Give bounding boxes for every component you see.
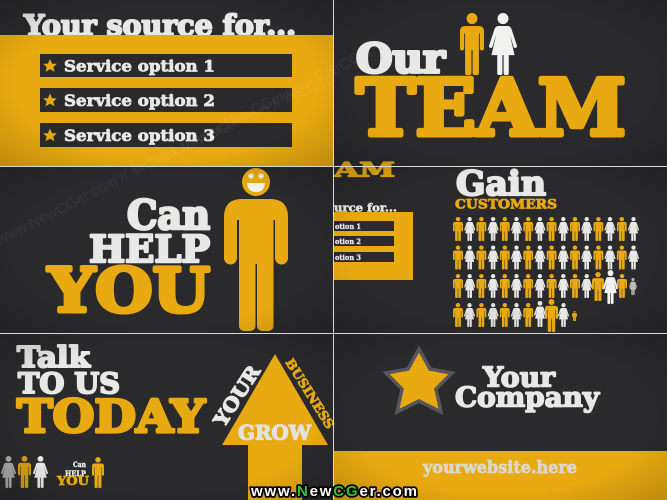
icon: star logo [386,349,452,412]
previous slide remnant [332,158,413,280]
icon: woman [489,13,517,75]
panel: your company [334,349,667,500]
small people icons [1,456,48,488]
previous slide remnant: otion 1 [335,222,361,231]
yellow footer band [334,451,667,500]
previous slide remnant: otion 3 [335,253,361,262]
heading: your source for: Your source for... [23,9,296,42]
service option 2: Service option 2 [64,91,215,110]
heading: talk: Talk [17,340,91,374]
website: yourwebsite.here [422,458,577,478]
panel: gain customers [332,158,639,332]
service option 3: Service option 3 [64,126,215,145]
icon: smiling person [224,168,288,331]
heading: gain: Gain [456,164,546,204]
previous slide remnant: urce for... [334,200,397,214]
icon: man [460,13,484,75]
panel: talk to us today [1,340,338,500]
heading: our: Our [356,36,446,82]
panel: your source for [0,9,333,166]
heading: company: Company [455,382,600,414]
faint diagonal watermark: www.NewCGer.com // 新CG儿 // www.NewCGer.com // 新CG儿 [0,42,378,249]
arrow: grow your business [209,354,338,500]
service option 2 [40,88,292,112]
heading: today: TODAY [17,390,206,443]
heading: help: HELP [89,227,210,271]
small can help you [56,457,104,488]
service option 3 [40,123,292,147]
panel: our team [356,13,626,154]
heading: your: Your [482,362,556,394]
heading: to us: TO US [18,367,120,400]
heading: can: Can [127,192,210,239]
previous slide remnant: AM [332,158,395,182]
yellow band [0,35,333,166]
label: business: BUSINESS [282,356,338,431]
label: grow: GROW [238,420,312,444]
small can help you: Can [73,460,86,469]
label: your: YOUR [209,362,265,432]
faint diagonal watermark: www.NewCGer.com // 新CG儿 [144,71,335,172]
small can help you: YOU [56,474,90,488]
heading: you: YOU [47,256,210,326]
panel: can help you [47,168,288,331]
service option 1: Service option 1 [64,56,215,76]
service option 1 [40,54,292,77]
heading: team: TEAM [356,63,626,154]
previous slide remnant: otion 2 [335,237,361,246]
small can help you: HELP [65,469,86,478]
heading: customers: CUSTOMERS [455,198,557,212]
people grid [453,217,639,332]
site watermark: www.NewCGer.com [250,483,417,500]
